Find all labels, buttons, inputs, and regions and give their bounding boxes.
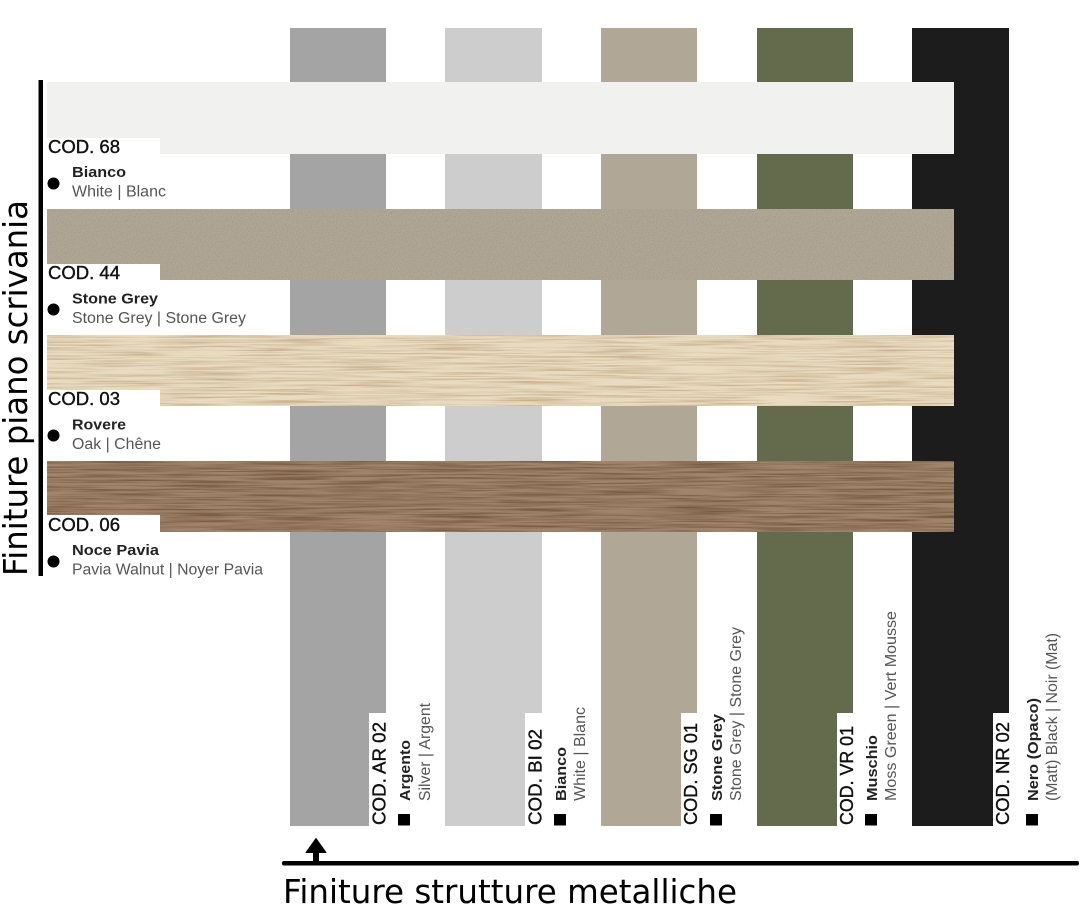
label: COD. NR 02 Nero (Opaco): Nero (Opaco) xyxy=(1025,698,1042,801)
strip: stone grey 44 xyxy=(47,209,954,280)
label: COD. 44 Stone Grey: COD. 44 xyxy=(48,262,120,283)
label: COD. 03 Rovere xyxy=(48,388,161,453)
label: COD. NR 02 Nero (Opaco) xyxy=(992,633,1061,826)
label: COD. SG 01 Stone Grey: Stone Grey | Stone Grey xyxy=(728,627,745,801)
label: COD. SG 01 Stone Grey xyxy=(680,627,745,826)
axis: metal finishes xyxy=(282,838,1079,911)
strip: oak 03 xyxy=(47,335,954,406)
vertical metal finish strips xyxy=(290,28,1009,826)
label: COD. 06 Noce Pavia: COD. 06 xyxy=(48,514,120,535)
label: COD. BI 02 Bianco: COD. BI 02 xyxy=(524,729,546,825)
heading: Finiture strutture metalliche: Finiture strutture metalliche xyxy=(283,873,737,911)
label: COD. 03 Rovere: COD. 03 xyxy=(48,388,120,409)
label: COD. SG 01 Stone Grey: Stone Grey xyxy=(709,713,726,801)
strip: matt black NR 02 xyxy=(912,28,1009,826)
label: COD. BI 02 Bianco xyxy=(524,707,589,826)
label: COD. 06 Noce Pavia: Pavia Walnut | Noyer Pavia xyxy=(72,562,263,578)
label: COD. BI 02 Bianco: White | Blanc xyxy=(572,707,589,801)
label: COD. AR 02 Argento xyxy=(368,702,434,826)
label: COD. NR 02 Nero (Opaco): COD. NR 02 xyxy=(992,722,1013,825)
label: COD. 03 Rovere: Rovere xyxy=(72,416,126,434)
label: COD. 68 Bianco: White | Blanc xyxy=(72,184,166,200)
label: COD. BI 02 Bianco: Bianco xyxy=(553,747,570,801)
label: COD. VR 01 Muschio: Moss Green | Vert Mousse xyxy=(883,611,900,801)
axis bar xyxy=(282,861,1079,866)
label: COD. 68 Bianco: Bianco xyxy=(72,164,126,181)
strip: silver AR 02 xyxy=(290,28,386,826)
label: COD. 06 Noce Pavia: Noce Pavia xyxy=(72,542,160,559)
label: COD. AR 02 Argento: COD. AR 02 xyxy=(368,722,390,825)
horizontal desk finish strips xyxy=(47,82,954,532)
label: COD. 06 Noce Pavia xyxy=(48,514,263,578)
label: COD. 44 Stone Grey: Stone Grey xyxy=(72,290,159,308)
code label tabs xyxy=(47,138,1009,826)
axis bar xyxy=(38,80,43,576)
strip: walnut 06 xyxy=(47,461,954,532)
label: COD. AR 02 Argento: Argento xyxy=(397,740,414,801)
label: COD. 03 Rovere: Oak | Chêne xyxy=(72,436,161,453)
label: COD. 44 Stone Grey xyxy=(48,262,246,327)
label: COD. 44 Stone Grey: Stone Grey | Stone Grey xyxy=(72,310,246,327)
strip: stone grey SG 01 xyxy=(601,28,697,826)
label: COD. 68 Bianco: COD. 68 xyxy=(48,136,120,157)
label: COD. 68 Bianco xyxy=(48,136,166,200)
strip: white BI 02 xyxy=(445,28,542,826)
label: COD. AR 02 Argento: Silver | Argent xyxy=(417,702,434,801)
label: COD. VR 01 Muschio: Muschio xyxy=(864,735,881,801)
arrow pointing up xyxy=(306,838,326,862)
strip: white 68 xyxy=(47,82,954,154)
label: COD. SG 01 Stone Grey: COD. SG 01 xyxy=(680,723,701,825)
axis: desk finishes xyxy=(0,80,43,576)
strip: moss green VR 01 xyxy=(757,28,853,826)
label: COD. VR 01 Muschio: COD. VR 01 xyxy=(836,726,857,825)
label: COD. NR 02 Nero (Opaco): (Matt) Black | Noir (Mat) xyxy=(1044,633,1061,801)
label: COD. VR 01 Muschio xyxy=(836,611,900,826)
